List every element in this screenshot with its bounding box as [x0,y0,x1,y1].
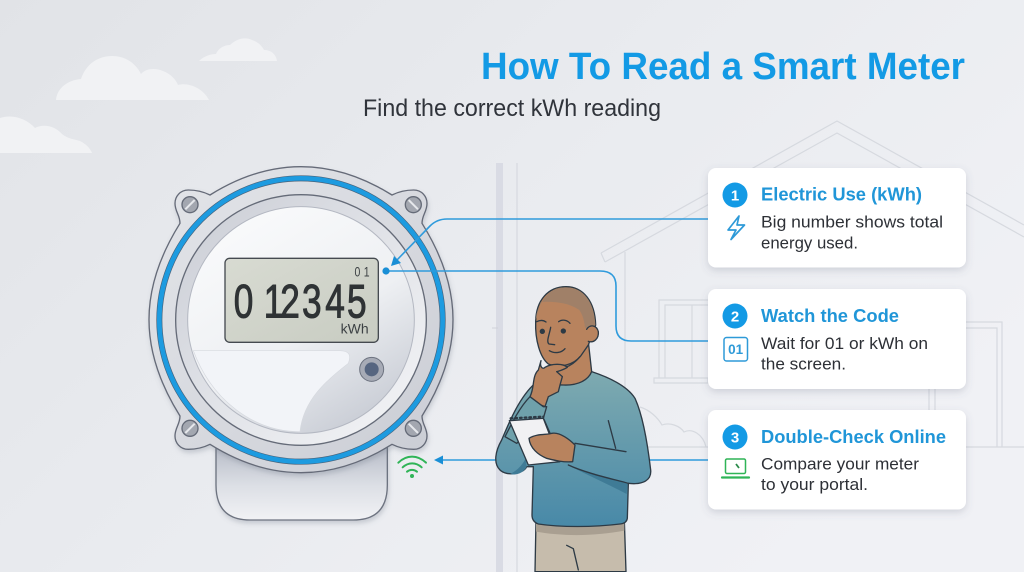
step number 2 [722,304,748,328]
sweater [496,372,651,526]
clouds [0,38,277,153]
hand on chin [530,361,567,407]
LCD display [225,258,378,342]
connector lines [386,219,708,460]
hand holding notepad [529,433,575,462]
notepad [509,417,560,465]
main digits: 012345 [234,275,367,328]
body text [761,212,943,252]
background house line art [601,121,1024,447]
hair [536,287,595,329]
card 2: watch the code [708,289,966,389]
blue ring [159,178,443,462]
title: How To Read a Smart Meter [481,46,965,88]
body text: the screen. [761,354,846,374]
utility pole [492,163,517,572]
body text: Big number shows total [761,212,943,232]
card 1: electric use [708,168,966,268]
neck [548,342,592,385]
unit label: kWh [341,321,369,337]
trousers [535,520,626,572]
meter face [188,207,414,433]
body text: to your portal. [761,475,868,494]
face highlight panel [193,351,350,432]
body text: energy used. [761,234,858,252]
arrowhead: connector 3 [434,456,443,464]
step number 1 [722,182,748,208]
screws [182,197,421,436]
body text: Compare your meter [761,454,919,474]
step number 1: 1 [731,188,739,204]
heading: Double-Check Online [761,426,946,447]
face features [537,320,580,367]
arrowhead: connector 1 [391,256,401,266]
icon: laptop [722,459,749,478]
ear [587,326,598,342]
step number 3 [722,424,748,450]
step number 3: 3 [731,430,739,446]
icon: 01 code box [724,338,748,361]
connector 1: electric use to display [396,219,708,261]
person with notepad [496,287,651,572]
bezel [176,195,426,445]
connector 2: watch the code to code indicator [386,271,708,341]
step number 2: 2 [731,308,739,326]
icon: 01 code box: 01 [728,342,744,357]
code reading: 01 [354,264,370,280]
meter mounting base [216,443,387,520]
raised forearm cuff [505,397,547,443]
head [536,287,598,367]
body text: Wait for 01 or kWh on [761,334,928,353]
smart meter [149,167,453,520]
connector dot: code indicator [382,267,390,275]
card 3: double-check online [708,410,966,510]
icon: lightning bolt [728,216,744,240]
icon: wifi [398,457,426,478]
body text [761,334,928,374]
subtitle: Find the correct kWh reading [363,95,661,122]
heading: Electric Use (kWh) [761,184,922,205]
body text [761,454,919,494]
meter button [360,357,384,381]
heading: Watch the Code [761,305,899,326]
connector 3: double-check online to wifi [442,459,708,461]
meter flange [149,167,453,473]
